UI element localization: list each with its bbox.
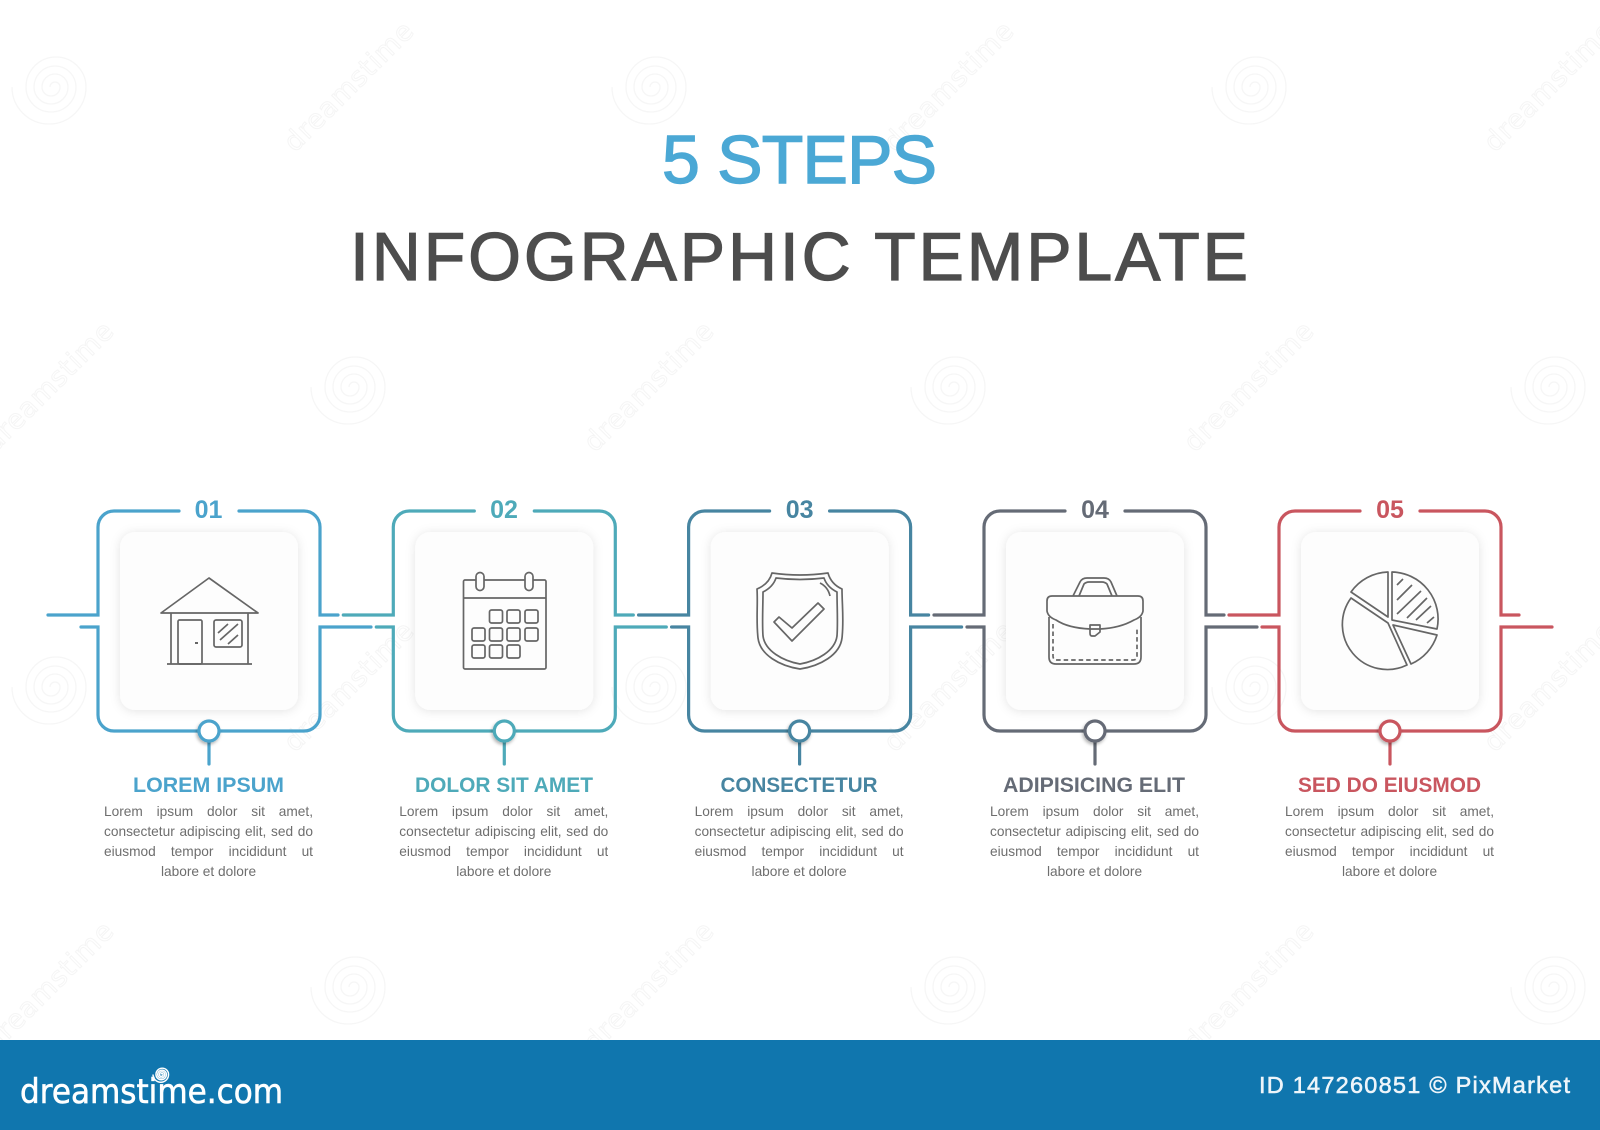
- step 3 label: CONSECTETUR: [720, 773, 878, 797]
- footer logo text: dreamstime.com: [20, 1072, 283, 1112]
- step 4 description: [990, 802, 1199, 882]
- watermark pattern: dreamstime: [1178, 916, 1320, 1058]
- step 5 panel: [1229, 496, 1552, 882]
- footer logo icon: [153, 1068, 169, 1082]
- step 2 card: [415, 532, 593, 710]
- step 5 description: consectetur adipiscing elit, sed do: [1285, 824, 1494, 839]
- step 2 panel: [343, 496, 666, 882]
- footer bar: [0, 1040, 1600, 1130]
- watermark pattern: dreamstime: [578, 316, 720, 458]
- step 2 frame and connectors: [343, 511, 666, 764]
- step 5 description: Lorem ipsum dolor sit amet,: [1285, 804, 1494, 819]
- icon: calendar: [464, 572, 546, 669]
- step 5 description: labore et dolore: [1342, 864, 1437, 879]
- step 4 description: labore et dolore: [1047, 864, 1142, 879]
- step 2 description: eiusmod tempor incididunt ut: [399, 844, 608, 859]
- step 1 frame and connectors: [48, 511, 371, 764]
- step 5 frame and connectors: [1229, 511, 1552, 764]
- icon: briefcase: [1047, 578, 1143, 664]
- step 2 number: 02: [490, 496, 518, 524]
- step 1 label: LOREM IPSUM: [133, 773, 284, 797]
- step 4 description: Lorem ipsum dolor sit amet,: [990, 804, 1199, 819]
- step 1 description: eiusmod tempor incididunt ut: [104, 844, 313, 859]
- step 4 description: consectetur adipiscing elit, sed do: [990, 824, 1199, 839]
- title: infographic template: INFOGRAPHIC TEMPLATE: [350, 219, 1248, 295]
- step 2 description: Lorem ipsum dolor sit amet,: [399, 804, 608, 819]
- title: 5 steps: 5 STEPS: [662, 122, 937, 198]
- step 5 description: [1285, 802, 1494, 882]
- step 1 number: 01: [195, 496, 222, 524]
- step 5 description: eiusmod tempor incididunt ut: [1285, 844, 1494, 859]
- step 5 card: [1301, 532, 1479, 710]
- step 1 description: labore et dolore: [161, 864, 256, 879]
- step 4 number: 04: [1081, 496, 1109, 524]
- watermark pattern: dreamstime: [278, 16, 420, 158]
- step 1 panel: [48, 496, 371, 882]
- watermark pattern: dreamstime: [1178, 316, 1320, 458]
- step 3 description: [695, 802, 904, 882]
- step 3 description: consectetur adipiscing elit, sed do: [695, 824, 904, 839]
- step 3 description: eiusmod tempor incididunt ut: [695, 844, 904, 859]
- watermark pattern: dreamstime: [878, 16, 1020, 158]
- footer image id: ID 147260851 © PixMarket: [1259, 1072, 1570, 1098]
- step 3 description: labore et dolore: [752, 864, 847, 879]
- step 1 description: [104, 802, 313, 882]
- step 2 description: [399, 802, 608, 882]
- step 1 description: Lorem ipsum dolor sit amet,: [104, 804, 313, 819]
- icon: pie chart: [1342, 572, 1438, 670]
- step 2 label: DOLOR SIT AMET: [415, 773, 593, 797]
- step 4 frame and connectors: [934, 511, 1257, 764]
- watermark pattern: dreamstime: [878, 616, 1020, 758]
- watermark pattern: dreamstime: [278, 616, 420, 758]
- step 3 panel: [639, 496, 962, 882]
- step 4 panel: [934, 496, 1257, 882]
- step 1 card: [120, 532, 298, 710]
- step 2 description: labore et dolore: [456, 864, 551, 879]
- icon: shield with check: [757, 573, 843, 669]
- step 1 description: consectetur adipiscing elit, sed do: [104, 824, 313, 839]
- step 3 frame and connectors: [639, 511, 962, 764]
- step 4 card: [1006, 532, 1184, 710]
- step 3 card: [711, 532, 889, 710]
- step 4 description: eiusmod tempor incididunt ut: [990, 844, 1199, 859]
- step 2 description: consectetur adipiscing elit, sed do: [399, 824, 608, 839]
- step 5 number: 05: [1376, 496, 1404, 524]
- icon: house: [161, 578, 258, 664]
- step 3 description: Lorem ipsum dolor sit amet,: [695, 804, 904, 819]
- step 4 label: ADIPISICING ELIT: [1003, 773, 1185, 797]
- watermark pattern: dreamstime: [578, 916, 720, 1058]
- step 5 label: SED DO EIUSMOD: [1298, 773, 1481, 797]
- step 3 number: 03: [786, 496, 814, 524]
